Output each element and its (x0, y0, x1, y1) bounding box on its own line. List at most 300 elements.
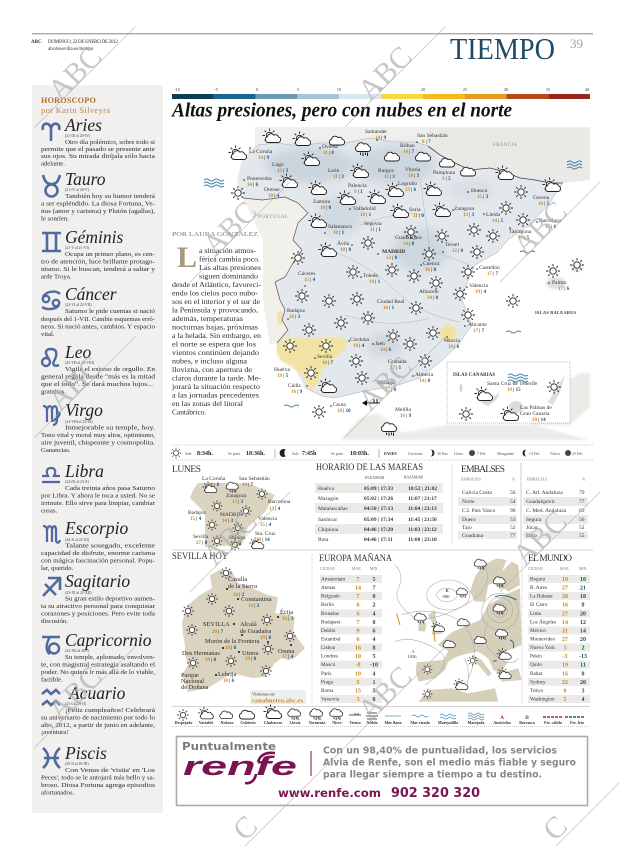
pressure labels (407, 588, 450, 659)
panel: Seville today map: Morón de la Frontera (205, 638, 260, 645)
table: Europe tomorrow: 16 (355, 646, 361, 652)
city names and temperatures: 10 | 1 (333, 231, 345, 236)
panel: Monday forecast map: 13 | 3 (232, 500, 244, 505)
table: Europe tomorrow: Belgrado (321, 594, 340, 600)
city names and temperatures: Huelva (274, 367, 290, 373)
city names and temperatures: Barcelona (539, 218, 562, 224)
page header: rule, date and section title: ABC (31, 40, 42, 45)
table: tide times: Huelva (318, 486, 334, 492)
city names and temperatures: 18 | 4 (353, 344, 365, 349)
table: world cities: Sydney (530, 679, 546, 685)
sun and moon times bar: FASES (384, 451, 397, 456)
table: world cities: 21 (580, 586, 586, 592)
city names and temperatures: 16 | 5 (538, 202, 550, 207)
sign: Piscis: Piscis (64, 743, 107, 763)
panel: Monday forecast map: 27 | 8 (196, 541, 208, 546)
sign: Capricornio: (22-XII al 20-I) (65, 649, 90, 653)
table: Europe tomorrow: MIN (370, 567, 378, 571)
table: world cities: 14 (580, 628, 586, 634)
city names and temperatures: Ávila (337, 239, 350, 247)
sign: Capricornio: poder. No quiera ir más allá de lo viable, (41, 669, 155, 676)
sign: Libra: cosas. (41, 508, 57, 514)
city names and temperatures: Toledo (363, 273, 378, 279)
legend: weather symbols: Marejadilla (438, 720, 458, 725)
table: world cities: México (530, 628, 546, 634)
sign: Géminis: tro de atención, luce brillante protago- (41, 258, 155, 266)
sea state waves and wind arrow (204, 161, 582, 407)
sign: Libra: Libra (64, 461, 104, 481)
table: tide times: Mazagón (318, 496, 339, 502)
sign: Escorpio: capacidad de disfrute, enorme carisma (41, 550, 155, 557)
sign: Acuario: su aniversario de nacimiento por todo lo (41, 714, 156, 722)
legend: weather symbols: Cubierto (240, 720, 256, 725)
panel: Monday forecast map: 15 | 4 (190, 517, 202, 522)
city names and temperatures: 13 | 3 (463, 213, 475, 218)
panel: Monday forecast map: 14 | 7 (242, 483, 254, 488)
table: Europe tomorrow: 4 (372, 637, 376, 643)
watermark: repeated diagonal ABC stamps: ABC (352, 350, 419, 417)
city names and temperatures: 17 | 6 (558, 287, 570, 292)
city names and temperatures: 19 | 15 (507, 388, 521, 393)
pressure labels: A (411, 649, 415, 654)
panel: Seville today map: 18 | 8 (225, 646, 237, 651)
city names and temperatures: León (328, 168, 340, 174)
sign: Escorpio: lar, querido. (41, 565, 74, 572)
borders: Pyrenees, Portugal and regional lines (242, 138, 563, 398)
sign: Aries: permite que el pasado se presente ante (41, 146, 155, 153)
city names and temperatures: Gerona (533, 195, 550, 201)
watermark: repeated diagonal ABC stamps: ABC (42, 350, 109, 417)
city names and temperatures: Palencia (348, 183, 367, 189)
sign: Cáncer: después del 1-VII. Cambie esquemas erró- (41, 316, 155, 323)
sign: Aries: sus ojos. Su mirada diríjala sólo hacia (41, 153, 155, 160)
sign: Piscis: (20-II al 20-III) (65, 762, 89, 766)
sign: Leo: Vigile el exceso de orgullo. En (65, 366, 156, 373)
table: tide times: 04:46 | 17:11 (364, 537, 393, 543)
city names and temperatures: Salamanca (328, 224, 352, 230)
panel: Monday forecast map: 13 | 4 (269, 507, 281, 512)
table: tide times: Chipiona (318, 527, 339, 533)
city names and temperatures: Teruel (445, 242, 459, 248)
legend: weather symbols: Fte. frío (570, 720, 584, 725)
city names and temperatures: 18 | 10 (337, 409, 351, 414)
sign: Aries: (21-III al 20-IV) (65, 134, 91, 138)
table: reservoirs: 52 (510, 525, 516, 531)
city names and temperatures: Córdoba (350, 337, 370, 343)
sun and moon times bar (171, 445, 593, 460)
city names and temperatures: 10 | 1 (360, 213, 372, 218)
country and island labels (258, 143, 576, 315)
table: Europe tomorrow: Dublín (321, 628, 336, 634)
sign: Capricornio: factible. (41, 676, 63, 684)
watermark: repeated diagonal ABC stamps: ABC (197, 195, 264, 262)
table: Europe tomorrow: 15 (355, 688, 361, 694)
table: Europe tomorrow: 7 (356, 594, 360, 600)
table: reservoirs: 54 (510, 499, 516, 505)
city names and temperatures: Jaén (375, 341, 385, 347)
city names and temperatures: 16 | 9 (291, 390, 303, 395)
table: Europe tomorrow: Lisboa (321, 645, 336, 651)
panel: Monday forecast map (172, 464, 291, 551)
sign: Leo: gratuitos. (41, 388, 66, 396)
sign: Acuario (41, 683, 156, 736)
city names and temperatures: Zaragoza (454, 206, 475, 212)
land: northern haze, France, Spain, Portugal (237, 127, 590, 398)
sign: Virgo: Tono vital y moral muy altos, optimismo, (41, 432, 155, 439)
table: reservoirs: 77 (579, 499, 585, 505)
table: tide times (315, 462, 443, 543)
city names and temperatures: Huesca (471, 188, 488, 194)
table: reservoirs: % (582, 478, 586, 482)
table: Europe tomorrow: Varsovia (321, 696, 340, 702)
country and island labels: FRANCIA (493, 143, 517, 148)
table: world cities: -3 (562, 654, 568, 660)
city names and temperatures: 14 | 6 (380, 348, 392, 353)
table: world cities: 3 (564, 646, 566, 652)
table: Europe tomorrow: Bruselas (321, 611, 339, 617)
sign: Sagitario: Su gran estilo deportivo aumen- (65, 596, 155, 602)
legend: weather symbols: Fte. cálido (544, 720, 562, 725)
table: Europe tomorrow: 0 (372, 594, 376, 600)
table: world cities: -13 (579, 654, 587, 660)
sign: Piscis (41, 743, 155, 796)
table: world cities (528, 553, 590, 703)
article body: siguen dominando (199, 272, 258, 280)
temperature colour scale: 40 (585, 87, 590, 92)
table: world cities: 3 (582, 688, 584, 694)
sign: Tauro: Tauro (65, 169, 106, 189)
table: world cities: MIN (579, 567, 587, 571)
city names and temperatures: 11 | 8 (323, 151, 334, 156)
sign: Cáncer: neos. Si nació antes, cambios. Y espacio (41, 324, 156, 330)
table: tide times: 11:07 | 21:17 (408, 496, 437, 502)
temperature colour scale: -10 (174, 87, 181, 92)
table: Europe tomorrow: Praga (321, 679, 334, 685)
city names and temperatures: 16 | 3 (289, 315, 301, 320)
city names and temperatures: 17 | 1 (390, 366, 402, 371)
panel: Seville today map: de Doñana (181, 684, 209, 691)
ad contact line: www.renfe.com (278, 786, 381, 800)
table: world cities: 12 (580, 620, 586, 626)
city names and temperatures: 20 | 14 (532, 418, 546, 423)
watermark: repeated diagonal ABC stamps: ABC (42, 40, 109, 107)
logo: renfe (183, 751, 297, 783)
table: reservoirs: 69 (579, 508, 585, 514)
map: Europe forecast chart (395, 558, 522, 702)
panel: Monday forecast map: Badajoz (188, 510, 207, 516)
temperature colour scale: -5 (214, 87, 219, 92)
ad copy: Alvia de Renfe, son el medio más fiable y seguro (323, 758, 576, 768)
table: reservoirs: Tajo (462, 525, 472, 531)
page header: rule, date and section title (31, 31, 593, 66)
table: Europe tomorrow: Estambul (321, 636, 341, 642)
article body: nubes, e incluso alguna (172, 356, 248, 366)
legend: weather symbols: Niebla (366, 720, 378, 725)
sign: Sagitario: ta su atractivo personal para conquistar (41, 603, 156, 610)
temperature colour scale: 25 (463, 87, 468, 92)
table: Europe tomorrow: 0 (372, 697, 376, 703)
panel: Seville today map: 16 | 2 (233, 593, 245, 598)
table: Europe tomorrow: MAX (352, 567, 361, 571)
sun and moon times bar: Nueva (550, 452, 560, 456)
city names and temperatures: Ciudad Real (377, 299, 405, 305)
city names and temperatures: 18 | 7 (322, 361, 334, 366)
callout: website box: Visítenos en: (252, 692, 275, 696)
article: byline and body text (171, 230, 262, 416)
ad copy (323, 746, 576, 780)
callout: website box (250, 690, 306, 704)
table: tide times: Rota (318, 537, 329, 543)
sign: Piscis: Con Venus de 'visita' en 'Los (65, 767, 155, 774)
watermark: repeated diagonal ABC stamps: ABC (352, 660, 419, 727)
table: Europe tomorrow: 7 (372, 586, 376, 592)
inset: Canary Islands (447, 362, 570, 423)
table: world cities: 16 (562, 603, 568, 609)
panel: Monday forecast map: Zaragoza (226, 493, 247, 499)
table: world cities: Nueva York (530, 645, 555, 651)
sign: Capricornio: Su temple, aplomado, envolven- (65, 654, 155, 661)
table: tide times: PLEAMAR (365, 476, 384, 480)
sun and moon times bar: Menguante (497, 452, 514, 456)
sun and moon times bar: 8:34h. (197, 451, 213, 457)
legend: weather symbols: A (500, 715, 504, 721)
legend: weather symbols (172, 704, 590, 726)
table: world cities: 8 (582, 671, 584, 677)
article body: nocturnas bajas, próximas (172, 322, 258, 332)
country and island labels: ISLAS BALEARES (535, 310, 576, 315)
legend: weather symbols: Nuboso (221, 720, 233, 725)
sign: Géminis: nismo. Si le buscan, tenderá a saltar y (41, 266, 156, 273)
panel: Monday forecast map: 14 | 8 (208, 483, 220, 488)
city names and temperatures: 15 | 3 (277, 169, 289, 174)
sun and moon times bar: 30 Ene (437, 452, 448, 456)
table: world cities: 5 (564, 697, 566, 703)
legend: weather symbols: Nieve (332, 720, 342, 725)
sign: Libra (41, 461, 156, 514)
sign: Aries (41, 115, 155, 168)
article body: además, temperaturas (172, 314, 243, 323)
sign: Géminis (41, 227, 156, 280)
article body: la Península y provocando, (172, 306, 258, 314)
city names and temperatures: 10 | 0 (320, 206, 332, 211)
panel: Monday forecast map: La Coruña (202, 476, 226, 482)
page header: rule, date and section title: 39 (570, 36, 583, 51)
sign: Cáncer: (22-VI al 22-VII) (65, 303, 92, 307)
city names and temperatures: 11 | 3 (333, 175, 344, 180)
panel: Seville today map: 16 | 3 (248, 604, 260, 609)
city names and temperatures: Sevilla (317, 354, 333, 360)
city names and temperatures: Santa Cruz de Tenerife (487, 380, 538, 387)
article body: vientos continúen dejando (172, 348, 259, 357)
table: reservoirs: 90 (510, 508, 516, 514)
table: Europe tomorrow: 8 (372, 646, 376, 652)
sign: Sagitario: Sagitario (65, 571, 130, 591)
panel: horoscope sidebar (32, 85, 163, 813)
table: Europe tomorrow: 1 (372, 680, 376, 686)
table: world cities: 27 (562, 611, 568, 617)
table: world cities: Tokyo (530, 688, 544, 694)
sign: Escorpio (41, 518, 155, 572)
sign: Libra: por Libra. Y ahora le toca a usted. No se (41, 492, 155, 500)
city location dots (243, 139, 550, 407)
sign: Acuario: (21-I al 19-II) (65, 702, 87, 706)
sign: Sagitario: (23-XI al 21-XII) (65, 591, 92, 595)
ad slogan: Puntualmente (182, 740, 276, 753)
sign: Leo: Leo (64, 342, 92, 362)
panel: Monday forecast map: Sevilla (193, 534, 209, 540)
table: reservoirs: C.I. País Vasco (462, 508, 495, 514)
city names and temperatures: 9 | 5 (442, 177, 451, 182)
table: Europe tomorrow: 4 (372, 671, 376, 677)
sign: Libra: (24-IX al 23-X) (65, 480, 90, 484)
article body: a las jornadas precedentes (172, 390, 259, 400)
callout: website box: canalmeteo.abc.es (252, 698, 304, 704)
pressure labels: 980 (443, 594, 450, 599)
sign: Leo: (23-VII al 23-VIII) (65, 361, 95, 365)
city names and temperatures: Castellón (479, 265, 500, 271)
table: reservoirs: 77 (510, 533, 516, 539)
sign: Virgo: Virgo (65, 400, 103, 420)
table: Europe tomorrow: 6 (372, 628, 376, 634)
sun and moon times bar: Creciente (408, 452, 423, 456)
sun and moon times bar: Se pone (331, 452, 343, 456)
city names and temperatures: Granada (388, 359, 407, 365)
sign: Leo: general regala desde "más es la mitad (41, 374, 156, 380)
country and island labels: PORTUGAL (258, 215, 288, 220)
table: world cities: La Habana (530, 594, 553, 600)
table: world cities: Quito (530, 662, 542, 668)
legend: weather symbols: Tormenta (309, 720, 325, 725)
table: reservoirs: EMBALSES (461, 478, 481, 482)
city names and temperatures: 14 | 5 (492, 219, 504, 224)
table: world cities: Montevideo (530, 636, 555, 642)
sign: Sagitario: corazones y posiciones. Pero evite toda (41, 610, 155, 618)
table: Europe tomorrow (319, 552, 392, 703)
table: Europe tomorrow: 6 (356, 603, 360, 609)
panel: Monday forecast map: 19 | 14 (256, 538, 270, 543)
panel: Seville today map: 18 | 6 (223, 679, 235, 684)
sun and moon times bar: Se pone (228, 452, 240, 456)
sign: Escorpio: Escorpio (64, 518, 128, 538)
legend: weather symbols: Anticiclón (493, 720, 512, 725)
watermark: repeated diagonal ABC stamps: ABC (42, 660, 109, 727)
article body: Cantábrico. (172, 408, 206, 416)
article body: en las zonas del litoral (172, 399, 243, 408)
table: world cities: 11 (580, 663, 586, 669)
city names and temperatures: Orense (264, 187, 280, 193)
sign: Capricornio: te, con magistral estrategia asaltando el (41, 662, 155, 668)
ad contact line: 902 320 320 (391, 786, 480, 801)
sign: Acuario: alto, 2012, a partir de junio en adelante, (41, 722, 155, 729)
table: Europe tomorrow: CIUDAD (320, 567, 335, 571)
table: tide times: 11:45 | 21:50 (408, 517, 437, 523)
table: reservoirs: Guadiana (462, 533, 484, 539)
sign: Cáncer: Cáncer (65, 284, 117, 304)
panel: Monday forecast map: 15 | 4 (260, 523, 272, 528)
article body: el norte se espera que los (172, 340, 256, 348)
city names and temperatures: Lugo (272, 162, 284, 168)
sign: Géminis: Ocupa un primer plano, es cen- (65, 251, 155, 258)
sign: Sagitario: discusión. (41, 618, 68, 625)
weather map of Spain (204, 127, 590, 440)
panel: Seville today map: SEVILLA HOY (172, 551, 228, 562)
table: Europe tomorrow: 14 (355, 586, 361, 592)
article body: llovizna, con apertura de (172, 365, 253, 374)
city names and temperatures: 11 | 0 (413, 214, 424, 219)
city names and temperatures: 16 | 0 (425, 268, 437, 273)
city names and temperatures: 12 | 0 (452, 249, 464, 254)
table: Europe tomorrow: 5 (372, 688, 376, 694)
table: reservoirs: C. Atl. Andaluza (526, 490, 563, 496)
sign: Virgo: aire juvenil, chispeante y cosmopolita. (41, 440, 155, 446)
table: reservoirs: C. Med. Andaluza (526, 508, 567, 514)
article body: jorará la situación respecto (171, 382, 260, 391)
sun and moon times bar: Sale (185, 452, 192, 456)
panel: Monday forecast map: Valencia (258, 516, 277, 522)
drop cap: L (177, 241, 197, 274)
table: tide times: 11:00 | 23:10 (408, 537, 437, 543)
page header: rule, date and section title: abcdesevilla.es/tiempo (48, 47, 94, 52)
table: world cities: Bogotá (530, 576, 546, 582)
table: Europe tomorrow: Berlín (321, 602, 334, 608)
city names and temperatures: 15 | 3 (477, 195, 489, 200)
inset: Canary Islands: ISLAS CANARIAS (453, 373, 495, 378)
city names and temperatures: 8 | 7 (422, 140, 431, 145)
table: tide times: 04:46 | 17:20 (364, 527, 393, 533)
table: world cities: 4 (582, 697, 584, 703)
table: tide times: HORARIO DE LAS MAREAS (316, 462, 423, 473)
city names and temperatures: 14 | 1 (369, 280, 381, 285)
table: tide times: 05:09 | 17:33 (364, 486, 393, 492)
land: North Africa and Balearic Islands (340, 264, 590, 440)
table: Europe tomorrow: Budapest (321, 619, 341, 625)
table: world cities: EL MUNDO (528, 553, 572, 564)
city names and temperatures: 10 | 0 (340, 248, 352, 253)
city names and temperatures (247, 129, 570, 423)
table: Europe tomorrow: 4 (372, 611, 376, 617)
panel: Monday forecast map: Barcelona (268, 499, 291, 505)
table: world cities: 14 (562, 620, 568, 626)
temperature colour scale: 5 (297, 87, 300, 92)
city names and temperatures: Soria (409, 207, 421, 213)
sign: Acuario: Acuario (68, 683, 126, 703)
sign: Aries: Aries (64, 115, 102, 135)
sign: Libra: irrinute. Ello sirve para limpiar, cambiar (41, 500, 156, 507)
sign: Cáncer: Saturno le pide cuentas si nació (65, 308, 156, 315)
city names and temperatures: 14 | 6 (247, 183, 259, 188)
panel: Monday forecast map: 15 | 8 (230, 542, 242, 547)
city names and temperatures: 16 | 9 (400, 414, 412, 419)
sign: Acuario: ¡aventura! (41, 729, 68, 736)
table: world cities: Lima (530, 611, 542, 617)
city names and temperatures: Pamplona (433, 170, 456, 176)
table: Europe tomorrow: 10 (355, 654, 361, 660)
city names and temperatures: 10 | 4 (268, 194, 280, 199)
table: reservoirs: % (512, 478, 516, 482)
sign: Escorpio: Talante sosegado, excelente (65, 542, 155, 550)
article body: sos en el interior y el sur de (172, 297, 261, 306)
article body (171, 246, 262, 416)
panel: Seville today map (172, 551, 306, 704)
legend: weather symbols: Viento (349, 720, 361, 725)
city names and temperatures: 15 | 6 (545, 225, 557, 230)
sign: Tauro (41, 169, 155, 222)
legend: weather symbols: Lluvia (289, 720, 301, 725)
city names and temperatures: 10 | 3 (408, 174, 420, 179)
city names and temperatures: 19 | 5 (277, 374, 289, 379)
sign: Géminis: arde Troya. (41, 274, 72, 280)
legend: weather symbols: Variable (199, 720, 213, 725)
